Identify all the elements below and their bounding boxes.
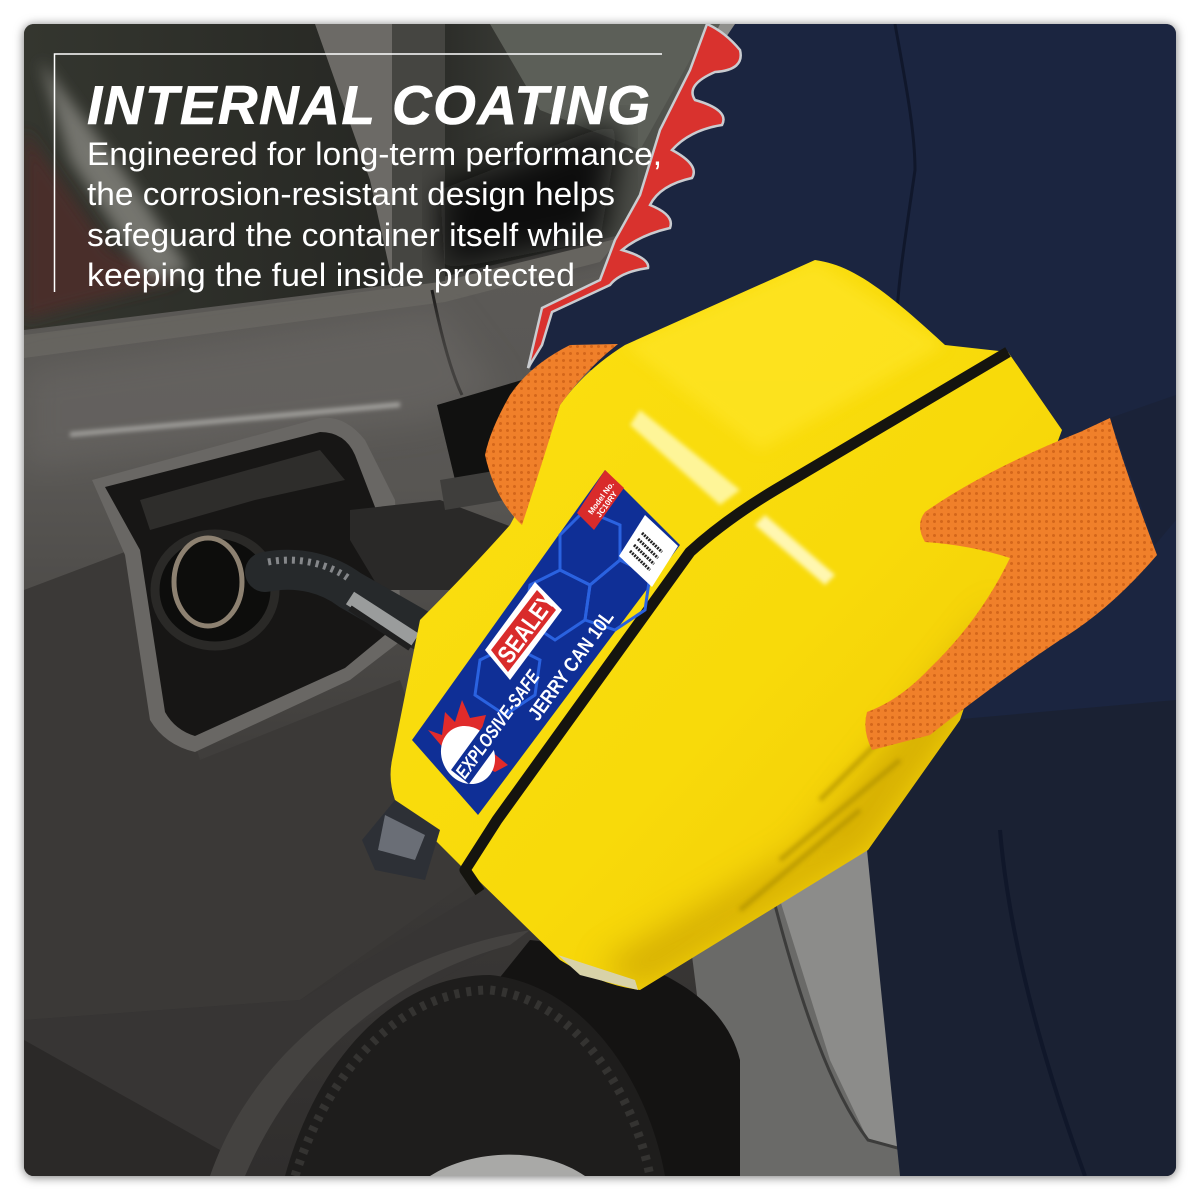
label model badge: Model No. bbox=[586, 480, 616, 516]
trousers bbox=[867, 700, 1176, 1176]
can highlights bbox=[630, 410, 740, 505]
fuel flap recess bbox=[92, 418, 402, 752]
red sleeve panel bbox=[528, 24, 741, 368]
left glove bbox=[485, 344, 618, 525]
label barcode bbox=[619, 515, 678, 587]
label model badge bbox=[577, 470, 624, 530]
side window glass bbox=[24, 24, 720, 330]
label product name: JERRY CAN 10L bbox=[524, 607, 618, 725]
can rubber band bbox=[465, 352, 1008, 892]
jacket bbox=[530, 24, 1176, 720]
description text: keeping the fuel inside protected bbox=[87, 257, 575, 293]
can cap bbox=[362, 800, 440, 880]
label product name: EXPLOSIVE-SAFE bbox=[452, 666, 545, 783]
dark lower door bbox=[24, 552, 405, 718]
description text: Engineered for long-term performance, bbox=[87, 136, 662, 172]
description text: the corrosion-resistant design helps bbox=[87, 176, 615, 212]
can body bbox=[380, 250, 1080, 1000]
can upper facet bbox=[625, 260, 945, 450]
floor and background bbox=[718, 24, 735, 36]
filler neck ring bbox=[155, 534, 275, 646]
jacket sleeve cuff bbox=[1110, 395, 1176, 545]
fuel flap door bbox=[350, 500, 520, 590]
label product name bbox=[451, 607, 618, 784]
can lower shade bbox=[602, 628, 966, 990]
tyre and wheel arch bbox=[210, 930, 740, 1176]
description text bbox=[87, 136, 662, 293]
label model badge: JC10RY bbox=[594, 489, 620, 519]
right glove bbox=[865, 418, 1157, 750]
can ridges bbox=[738, 745, 902, 912]
description text: safeguard the container itself while bbox=[87, 217, 604, 253]
label brand logo: SEALEY bbox=[492, 587, 562, 669]
product label bbox=[412, 470, 680, 815]
can base rim bbox=[558, 955, 638, 990]
fuel spout bbox=[265, 560, 420, 648]
title: INTERNAL COATING bbox=[87, 74, 650, 136]
label brand logo bbox=[485, 582, 562, 680]
door shut line bbox=[432, 290, 462, 395]
window sill strip bbox=[24, 238, 620, 358]
rear door panel bbox=[692, 904, 900, 1176]
label hexagon pattern bbox=[475, 510, 650, 715]
label bomb icon bbox=[428, 700, 508, 784]
body highlights bbox=[70, 402, 400, 437]
text frame bbox=[54, 54, 662, 292]
